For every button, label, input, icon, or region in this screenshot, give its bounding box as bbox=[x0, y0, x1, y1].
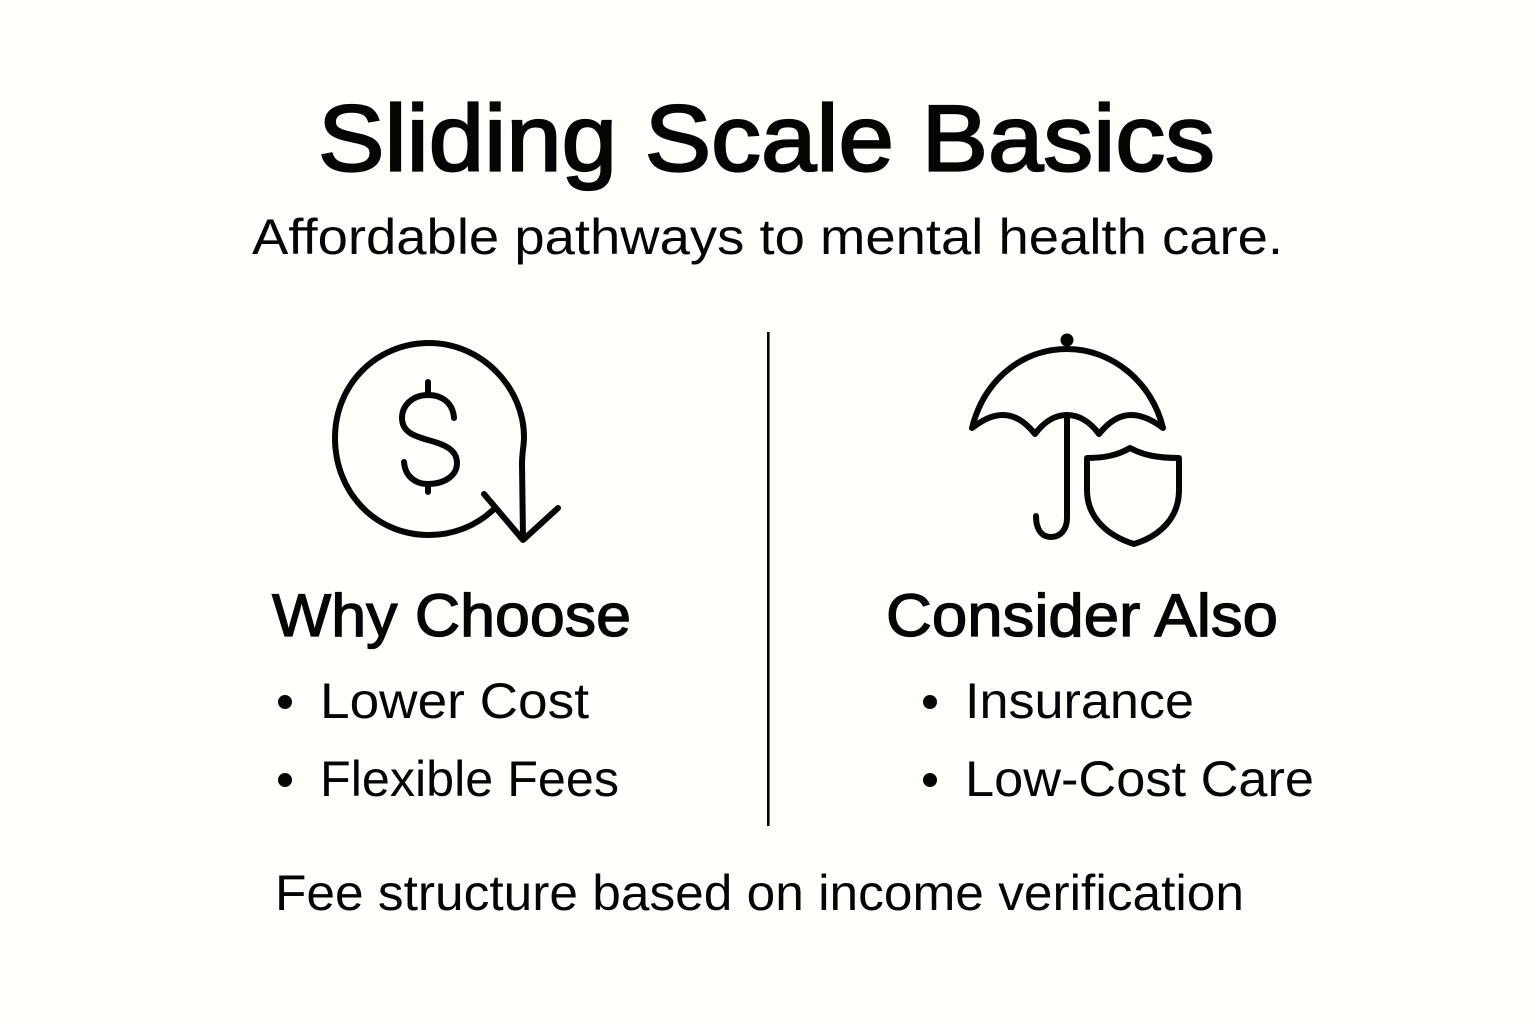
list: why choose items: Flexible Fees bbox=[320, 751, 619, 807]
subtitle: Affordable pathways to mental health care. bbox=[252, 209, 1283, 265]
list: why choose items bbox=[278, 673, 619, 807]
list: consider also items: Insurance bbox=[965, 673, 1194, 729]
title: Sliding Scale Basics bbox=[318, 86, 1215, 190]
footer note: Fee structure based on income verification bbox=[275, 865, 1244, 921]
vertical divider bbox=[767, 332, 770, 826]
icon: dollar circle with down arrow bbox=[335, 343, 558, 540]
list: consider also items bbox=[923, 673, 1314, 807]
list: why choose items: Lower Cost bbox=[320, 673, 589, 729]
heading: consider also: Consider Also bbox=[886, 582, 1278, 649]
icon: umbrella and shield bbox=[972, 334, 1179, 544]
list: consider also items: Low-Cost Care bbox=[965, 751, 1314, 807]
heading: why choose: Why Choose bbox=[272, 582, 631, 649]
